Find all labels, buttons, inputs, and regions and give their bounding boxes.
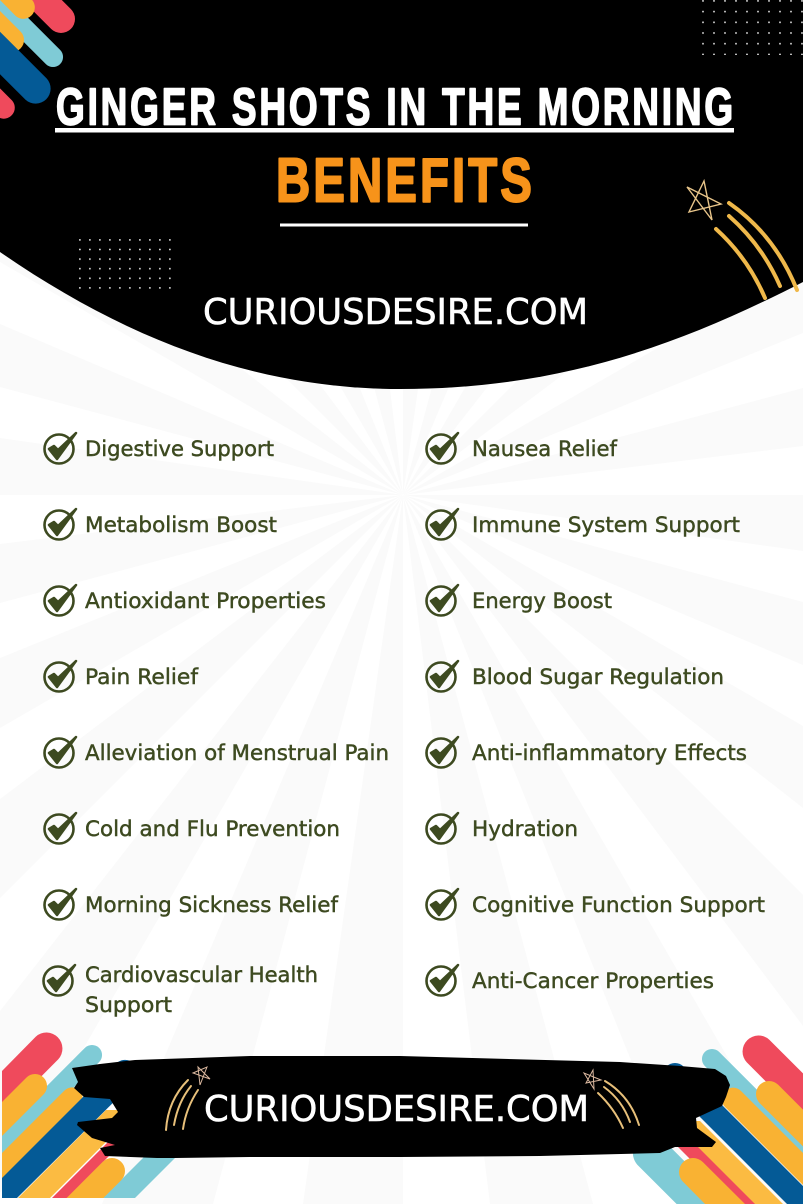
- item: anti-inflammatory effects: Anti-inflammatory Effects: [472, 741, 747, 765]
- item: cold and flu prevention: [44, 813, 340, 844]
- item: alleviation of menstrual pain: [44, 737, 389, 768]
- title underline: [55, 128, 734, 132]
- item: nausea relief: [426, 433, 618, 464]
- item: antioxidant properties: [44, 585, 326, 616]
- item: blood sugar regulation: [426, 661, 724, 692]
- item: energy boost: Energy Boost: [472, 589, 612, 613]
- black brush banner: [72, 1056, 730, 1158]
- icon: shooting star top right: [687, 181, 797, 298]
- website label bottom: CURIOUSDESIRE.COM: [204, 1089, 589, 1130]
- subtitle: benefits: BENEFITS: [276, 146, 535, 216]
- decoration: top-left dot grid: [78, 238, 171, 289]
- item: anti-inflammatory effects: [426, 737, 747, 768]
- decoration: top-right dot grid: [702, 0, 803, 55]
- item: energy boost: [426, 585, 612, 616]
- item: digestive support: [44, 433, 274, 464]
- item: nausea relief: Nausea Relief: [472, 437, 618, 461]
- black header panel: [0, 0, 803, 389]
- benefits list: right column: [426, 433, 765, 996]
- item: antioxidant properties: Antioxidant Properties: [85, 589, 326, 613]
- item: pain relief: Pain Relief: [85, 665, 199, 689]
- decoration: bottom-left colored stripes: [2, 1033, 190, 1198]
- item: anti-cancer properties: [426, 965, 714, 996]
- decoration: top-left colored stripes: [0, 0, 75, 119]
- item: cardiovascular health support: [44, 963, 318, 1017]
- website label top: CURIOUSDESIRE.COM: [203, 292, 588, 333]
- item: metabolism boost: Metabolism Boost: [85, 513, 277, 537]
- item: hydration: Hydration: [472, 817, 578, 841]
- icon: shooting star bottom left: [166, 1067, 210, 1130]
- item: anti-cancer properties: Anti-Cancer Properties: [472, 969, 714, 993]
- item: cold and flu prevention: Cold and Flu Prevention: [85, 817, 340, 841]
- item: cardiovascular health support: Support: [85, 993, 172, 1017]
- benefits list: left column: [44, 433, 389, 1017]
- item: cognitive function support: [426, 889, 765, 920]
- item: pain relief: [44, 661, 199, 692]
- item: morning sickness relief: [44, 889, 339, 920]
- item: alleviation of menstrual pain: Alleviation of Menstrual Pain: [85, 741, 389, 765]
- item: hydration: [426, 813, 578, 844]
- item: digestive support: Digestive Support: [85, 437, 274, 461]
- icon: shooting star bottom right: [584, 1070, 639, 1128]
- item: immune system support: Immune System Support: [472, 513, 740, 537]
- item: metabolism boost: [44, 509, 277, 540]
- subtitle underline: [280, 224, 528, 226]
- item: cardiovascular health support: Cardiovascular Health: [85, 963, 318, 987]
- item: blood sugar regulation: Blood Sugar Regulation: [472, 665, 724, 689]
- item: morning sickness relief: Morning Sickness Relief: [85, 893, 339, 917]
- item: immune system support: [426, 509, 740, 540]
- decoration: bottom-right colored stripes: [633, 1036, 803, 1204]
- item: cognitive function support: Cognitive Function Support: [472, 893, 765, 917]
